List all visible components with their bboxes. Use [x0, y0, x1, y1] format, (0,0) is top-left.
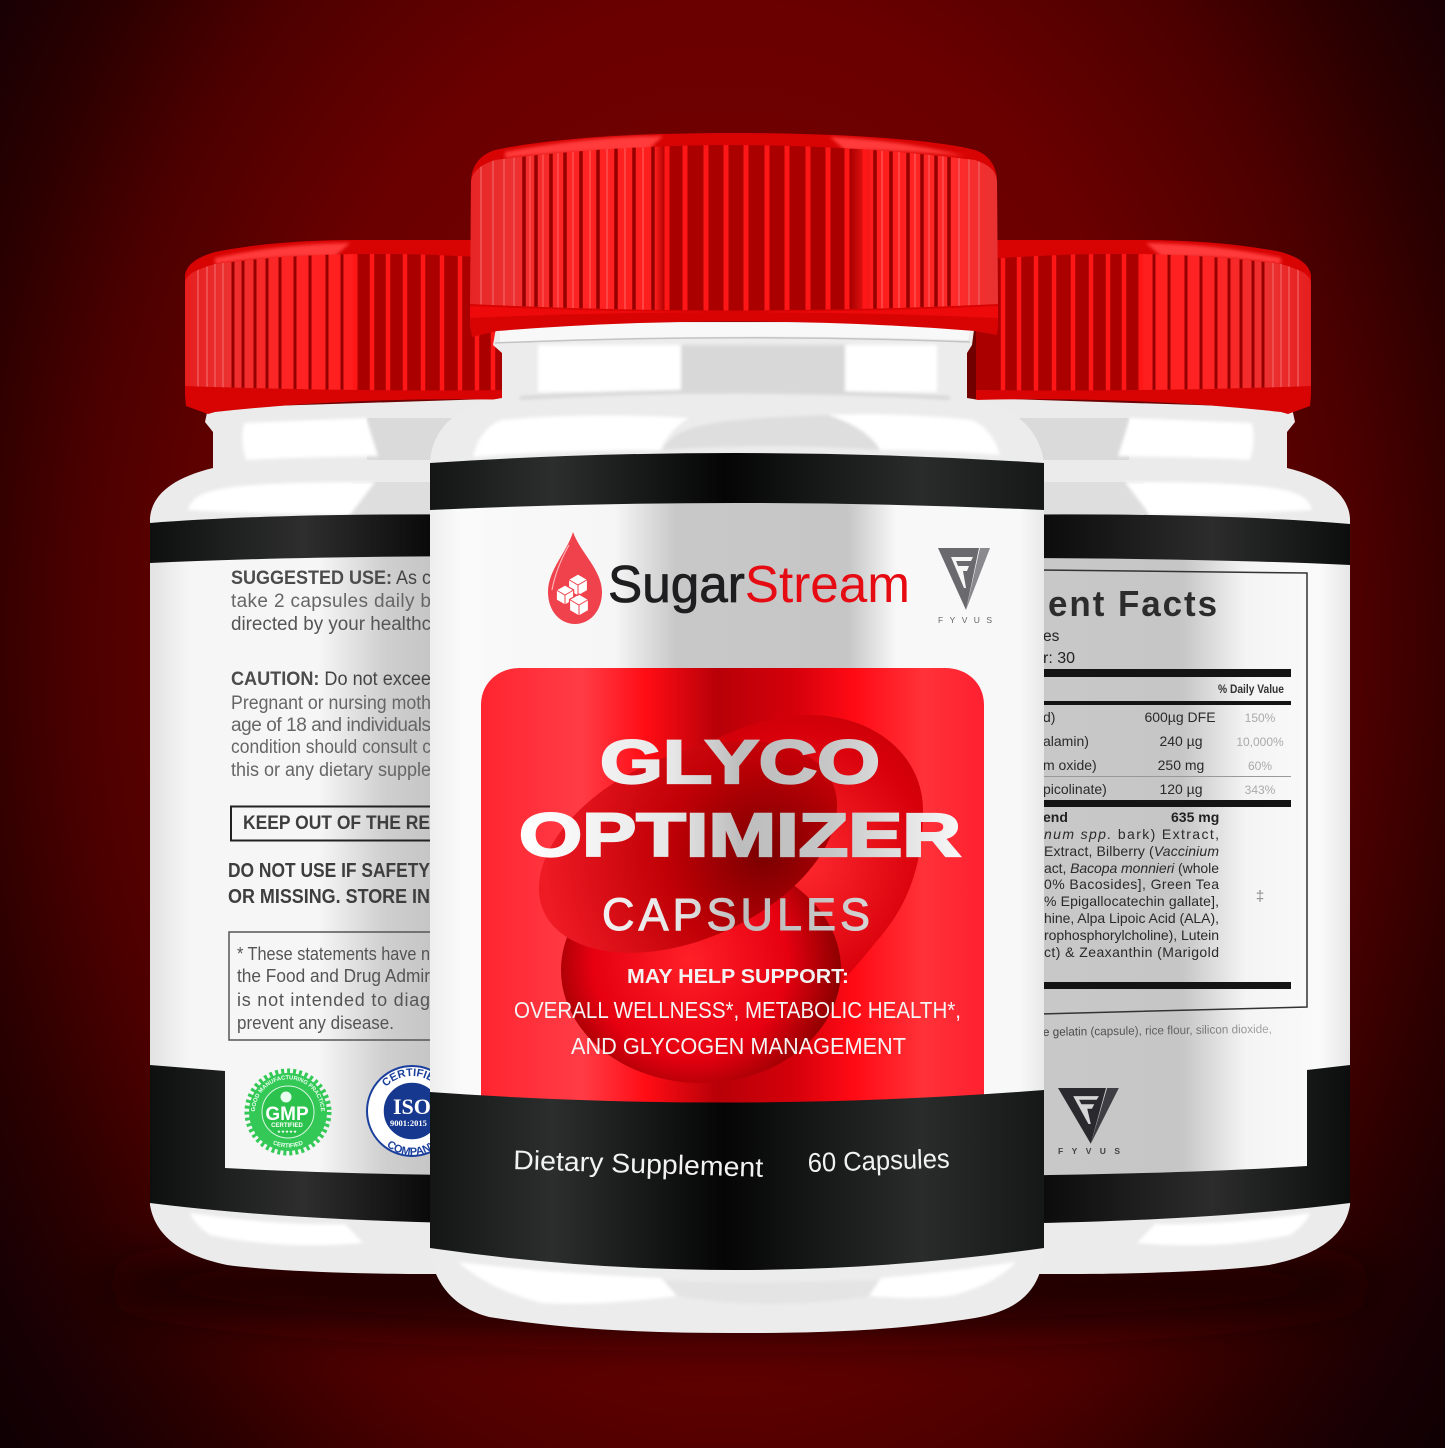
table rows: alamin) — [1043, 733, 1089, 749]
brand logo: SugarStream — [548, 532, 910, 624]
cap shell — [470, 133, 998, 337]
left upper black band — [150, 514, 520, 563]
GMP badge — [244, 1068, 332, 1156]
table rows: 120 µg — [1159, 781, 1203, 797]
table rows: 343% — [1245, 783, 1276, 797]
ISO badge — [366, 1065, 431, 1157]
red product panel — [481, 668, 984, 1110]
left label text: prevent any disease. — [237, 1013, 394, 1033]
neck ring shadow — [495, 338, 970, 343]
GMP badge: CERTIFIED — [271, 1123, 303, 1129]
neck highlights — [520, 345, 950, 398]
left cap ribs — [185, 254, 502, 390]
blend ingredients: num spp. bark) Extract, — [1044, 826, 1219, 842]
lower black band — [430, 1090, 1044, 1270]
title GLYCO: GLYCO — [600, 728, 880, 796]
GMP badge: ★★★★★ — [277, 1129, 298, 1134]
table rows: 250 mg — [1158, 757, 1204, 773]
left neck shade — [367, 418, 520, 460]
center bottle body — [430, 322, 1044, 1333]
ISO badge: 9001:2015 — [390, 1118, 427, 1128]
right label area — [1020, 555, 1350, 1185]
facts title: ent Facts — [1048, 583, 1219, 624]
blend ingredients: 0% Bacosides], Green Tea — [1044, 876, 1219, 892]
left label area — [150, 555, 480, 1185]
left neck highlight — [242, 418, 378, 460]
other ingredients: e gelatin (capsule), rice flour, silicon dioxide, — [1043, 1022, 1272, 1039]
table rows: 600µg DFE — [1144, 709, 1216, 725]
shoulder highlights — [473, 414, 1000, 457]
ISO badge: COMPANY — [388, 1141, 430, 1155]
right base highlight — [1137, 1213, 1310, 1245]
capsule count text: 60 Capsules — [807, 1144, 950, 1178]
ISO badge: ISO — [393, 1094, 431, 1119]
dietary supplement text: Dietary Supplement — [513, 1145, 764, 1183]
daily value header: % Daily Value — [1218, 684, 1284, 696]
right shoulder shade — [1026, 482, 1148, 516]
table rows: 10,000% — [1236, 735, 1284, 749]
keep out box — [231, 806, 451, 840]
right bottle: supplement facts panel — [976, 240, 1350, 1274]
ISO badge: CERTIFIED — [382, 1068, 430, 1086]
wordmark: SugarStream — [608, 556, 910, 614]
panel background — [481, 668, 984, 1110]
label area — [430, 500, 1044, 1110]
left label text: age of 18 and individuals — [231, 715, 431, 736]
right cap ribs — [976, 254, 1311, 390]
left bottle body — [150, 398, 520, 1274]
blend ingredients: ct) & Zeaxanthin (Marigold — [1044, 944, 1219, 960]
left label text: Pregnant or nursing moth — [231, 693, 431, 714]
title OPTIMIZER: OPTIMIZER — [519, 801, 961, 869]
double dagger: ‡ — [1256, 888, 1264, 905]
table rows: 240 µg — [1159, 733, 1203, 749]
right neck highlight — [1118, 418, 1254, 460]
table rows — [1043, 709, 1284, 797]
table rows: m oxide) — [1043, 757, 1097, 773]
upper black band — [430, 453, 1044, 510]
neck ring highlight — [500, 323, 972, 342]
keep out text: KEEP OUT OF THE RE — [243, 813, 430, 834]
icon: FYVUS logo on right bottle — [1058, 1088, 1120, 1156]
right upper black band — [976, 514, 1350, 565]
right cap — [976, 240, 1311, 414]
blend ingredients: Extract, Bilberry (Vaccinium — [1044, 843, 1219, 859]
GMP badge: CERTIFIED — [273, 1140, 303, 1148]
left base highlight — [190, 1213, 363, 1245]
rule — [1044, 800, 1291, 807]
table rows: picolinate) — [1043, 781, 1107, 797]
table rows: d) — [1043, 709, 1055, 725]
left label text: take 2 capsules daily b — [231, 591, 431, 612]
left cap — [185, 240, 520, 414]
rule — [1044, 982, 1291, 989]
rule — [1044, 669, 1291, 677]
bottom highlights — [458, 1262, 1016, 1304]
left cap rim highlight — [215, 243, 350, 264]
left label text: OR MISSING. STORE IN — [228, 886, 430, 908]
icon: FYVUS logo on right bottle: FYVUS — [1058, 1146, 1120, 1156]
supplement facts panel: r: 30 — [1043, 650, 1075, 667]
left label text: the Food and Drug Admir — [237, 966, 430, 986]
serving info: es — [1043, 628, 1060, 645]
left lower black band — [150, 1065, 520, 1224]
disclaimer text: * These statements have n — [237, 944, 430, 964]
subtitle CAPSULES: CAPSULES — [602, 889, 870, 940]
right shoulder highlight — [1125, 482, 1312, 515]
cap ribs — [470, 145, 998, 310]
center bottle: front — [430, 322, 1044, 1333]
blend ingredients: hine, Alpa Lipoic Acid (ALA), — [1044, 910, 1219, 926]
GMP badge: GOOD MANUFACTURING PRACTICE — [251, 1075, 325, 1112]
right bottle body — [976, 398, 1350, 1274]
left label text: condition should consult c — [231, 737, 431, 758]
left bottle: back panel — [150, 240, 520, 1274]
proprietary blend heading: end — [1043, 809, 1068, 825]
left shoulder shade — [348, 482, 470, 516]
center cap — [470, 130, 998, 337]
icon: FYVUS logo on front: FYVUS — [938, 615, 992, 625]
blood cell lower — [561, 857, 841, 1083]
cap lower edge — [470, 306, 998, 318]
blend ingredients: % Epigallocatechin gallate], — [1044, 893, 1219, 909]
left label text — [228, 568, 451, 1040]
facts box outline — [1040, 570, 1307, 1014]
right cap rim highlight — [1146, 243, 1281, 264]
blend ingredients: act, Bacopa monnieri (whole — [1044, 860, 1219, 876]
may help support: MAY HELP SUPPORT: — [627, 966, 849, 988]
benefits line 1: OVERALL WELLNESS*, METABOLIC HEALTH*, — [514, 997, 961, 1023]
supplement facts panel — [1040, 570, 1307, 1039]
ground shadow — [100, 1233, 1380, 1337]
blood cell back — [622, 715, 923, 1010]
icon: blood drop with sugar cubes — [548, 532, 602, 624]
right lower black band — [976, 1065, 1350, 1224]
blend ingredients — [1044, 826, 1219, 960]
blend ingredients: rophosphorylcholine), Lutein — [1044, 927, 1219, 943]
GMP badge: GMP — [265, 1104, 309, 1125]
icon: FYVUS logo on front — [938, 548, 992, 625]
blood cell upper — [506, 699, 870, 995]
left shoulder highlight — [188, 482, 375, 515]
do not use warning: DO NOT USE IF SAFETY — [228, 860, 431, 882]
caution: CAUTION: Do not excee — [231, 669, 431, 690]
benefits line 2: AND GLYCOGEN MANAGEMENT — [571, 1033, 906, 1059]
left label text: directed by your healthc — [231, 614, 431, 635]
left label text: is not intended to diag — [237, 990, 430, 1010]
disclaimer box — [229, 932, 451, 1040]
left label text: this or any dietary supple — [231, 760, 431, 781]
table rows: 150% — [1245, 711, 1276, 725]
cap rim highlights — [505, 136, 965, 158]
suggested use: SUGGESTED USE: As c — [231, 568, 431, 589]
rule — [1044, 701, 1291, 705]
right neck shade — [976, 418, 1129, 460]
supplement facts panel: 635 mg — [1171, 809, 1219, 825]
table rows: 60% — [1248, 759, 1272, 773]
